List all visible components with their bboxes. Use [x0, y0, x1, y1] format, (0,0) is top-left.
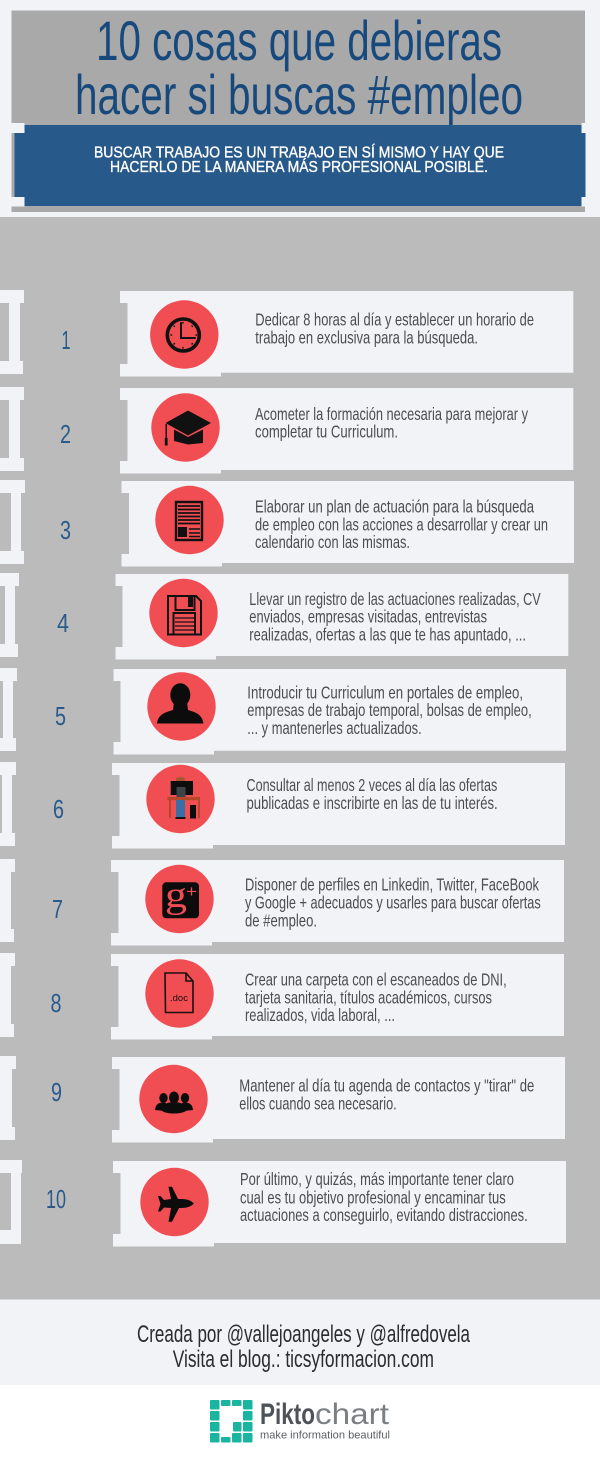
row 8: tarjeta sanitaria, títulos académicos, cursos — [245, 987, 492, 1007]
row 1: trabajo en exclusiva para la búsqueda. — [255, 328, 478, 348]
Piktochart logo: Pikto — [260, 1398, 315, 1431]
row 3: 3 — [60, 515, 71, 545]
row 3 — [0, 480, 574, 566]
icon: doc file — [165, 973, 193, 1012]
icon: group of people — [155, 1092, 193, 1114]
subtitle banner: HACERLO DE LA MANERA MÁS PROFESIONAL POSIBLE. — [110, 159, 488, 176]
row 2: completar tu Curriculum. — [255, 422, 398, 442]
row 3: calendario con las mismas. — [255, 532, 410, 552]
header panel — [12, 9, 586, 212]
icon: doc file: .doc — [170, 993, 188, 1004]
logo mark — [210, 1400, 252, 1442]
row 7: 7 — [52, 894, 63, 924]
row 10: 10 — [46, 1184, 66, 1214]
row 4: enviados, empresas visitadas, entrevistas — [249, 607, 487, 627]
icon: floppy disk — [168, 596, 201, 634]
row 4: 4 — [57, 608, 69, 638]
row 7: de #empleo. — [245, 910, 317, 930]
row 6 — [0, 762, 565, 848]
row 8 — [0, 953, 564, 1040]
Piktochart logo: make information beautiful — [260, 1430, 390, 1442]
row 6: publicadas e inscribirte en las de tu interés. — [246, 793, 498, 813]
icon: Google Plus: g — [165, 875, 187, 916]
row 10 — [0, 1160, 566, 1246]
row 5: ... y mantenerles actualizados. — [247, 718, 422, 738]
icon: Google Plus — [162, 875, 199, 918]
row 5: 5 — [55, 701, 66, 731]
title — [75, 9, 523, 126]
icon: clock — [167, 319, 199, 351]
row 7 — [0, 859, 564, 946]
row 9 — [0, 1056, 565, 1142]
icon: Google Plus: + — [186, 882, 197, 901]
row 4 — [0, 573, 568, 660]
row 6: Consultar al menos 2 veces al día las ofertas — [246, 775, 497, 795]
row 8: 8 — [50, 988, 62, 1018]
row 2 — [0, 387, 573, 474]
row 2: 2 — [60, 419, 71, 449]
row 9: 9 — [51, 1077, 62, 1107]
row 10: cual es tu objetivo profesional y encaminar tus — [240, 1187, 506, 1207]
footer credits: Visita el blog.: ticsyformacion.com — [173, 1346, 434, 1373]
row 1 — [0, 290, 573, 376]
icon: person silhouette — [157, 683, 204, 724]
row 5 — [0, 668, 566, 754]
row 1: 1 — [62, 325, 70, 355]
subtitle banner: BUSCAR TRABAJO ES UN TRABAJO EN SÍ MISMO Y HAY QUE — [94, 144, 504, 162]
footer credits — [0, 1300, 600, 1385]
row 10: Por último, y quizás, más importante tener claro — [240, 1169, 514, 1189]
Piktochart logo — [210, 1398, 390, 1442]
icon: person at computer desk — [168, 777, 200, 819]
icon: airplane — [158, 1187, 194, 1222]
Piktochart logo: chart — [315, 1398, 390, 1431]
row 8: Crear una carpeta con el escaneados de DNI, — [245, 970, 507, 990]
icon: document plan — [176, 502, 202, 540]
subtitle banner — [12, 123, 586, 206]
row 9: ellos cuando sea necesario. — [239, 1093, 397, 1113]
row 6: 6 — [53, 794, 64, 824]
row 8: realizados, vida laboral, ... — [245, 1005, 395, 1025]
icon: graduation cap — [165, 410, 211, 446]
